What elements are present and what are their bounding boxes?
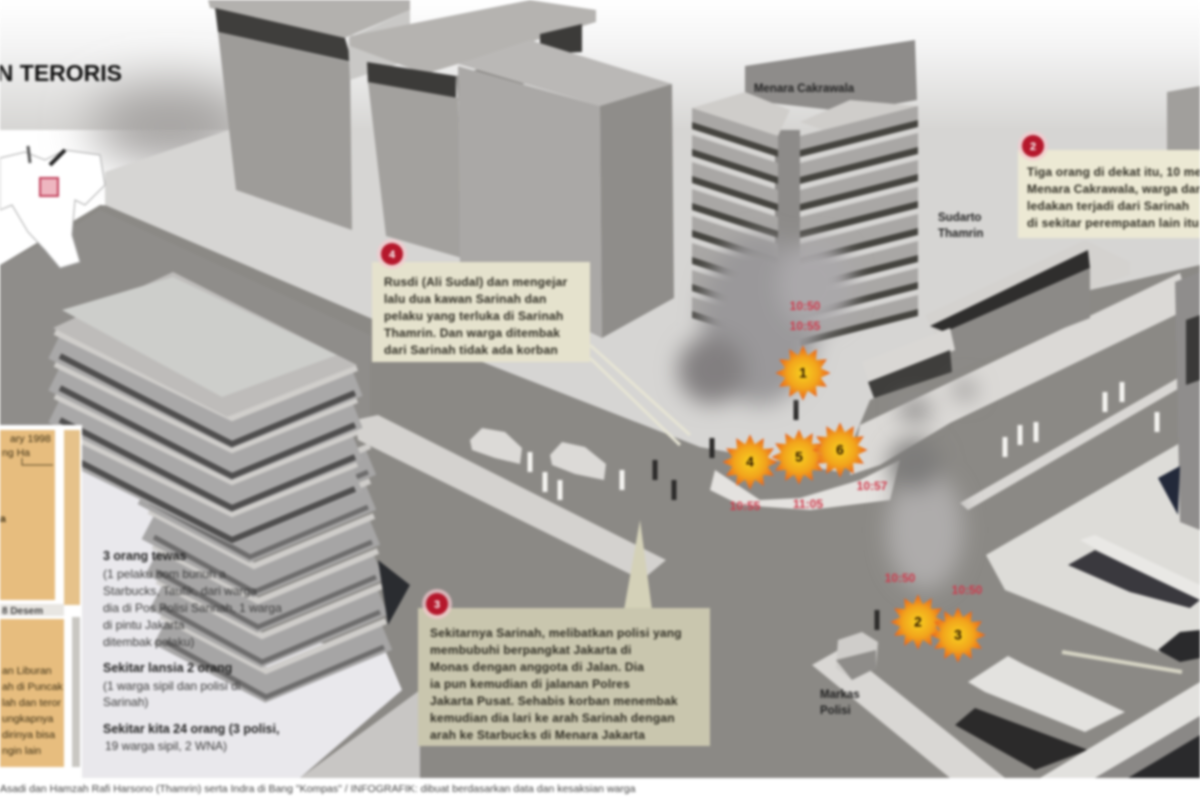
label: Sudarto Thamrin: Sudarto bbox=[938, 212, 981, 224]
callout: Rusdi: lalu dua kawan Sarinah dan bbox=[384, 292, 547, 306]
callout: Rusdi: Rusdi (Ali Sudal) dan mengejar bbox=[384, 275, 567, 289]
casualty list bbox=[103, 549, 282, 753]
label: post: Polisi bbox=[820, 705, 851, 717]
callout: Rusdi: pelaku yang terluka di Sarinah bbox=[384, 309, 563, 323]
building: middle block bbox=[350, 0, 596, 258]
tan panel lower: dirinya bisa bbox=[2, 729, 55, 741]
casualty list: Sarinah) bbox=[103, 695, 148, 709]
tan panel lower bbox=[0, 619, 64, 767]
building: right edge column bbox=[1175, 272, 1200, 530]
callout: Starbucks: Sekitarnya Sarinah, melibatkan polisi yang bbox=[430, 626, 682, 640]
label: post bbox=[820, 689, 860, 717]
callout: Starbucks: Monas dengan anggota di Jalan. Dia bbox=[430, 660, 644, 674]
title: N TERORIS bbox=[0, 60, 122, 86]
smoke plume upper bbox=[678, 235, 976, 422]
callout: top right: ledakan terjadi dari Sarinah bbox=[1027, 199, 1189, 213]
grey strip right bbox=[72, 617, 80, 767]
spike pointer above callout 2 bbox=[624, 520, 652, 610]
callout: Starbucks: membubuhi berpangkat Jakarta di bbox=[430, 643, 632, 657]
left grey haze bbox=[0, 210, 370, 425]
explosion 1: 1 bbox=[799, 366, 807, 381]
building: right edge top bbox=[1167, 86, 1200, 150]
explosion 2: 2 bbox=[914, 615, 922, 630]
pointer lines bbox=[590, 345, 690, 445]
lower left plaza shade bbox=[300, 690, 420, 778]
tan panel lower: ungkapnya bbox=[2, 713, 54, 725]
right road lane divider bbox=[960, 374, 1190, 510]
building: large left striped block bbox=[53, 272, 410, 697]
right sidewalk strip bbox=[850, 273, 1190, 475]
lower left plaza bbox=[80, 430, 402, 778]
building: front block bbox=[458, 40, 674, 338]
label: Sudarto Thamrin bbox=[938, 212, 983, 240]
building: sarinah wing bbox=[862, 240, 1130, 398]
label: post: Markas bbox=[820, 689, 860, 701]
footer credit: Asadi dan Hamzah Rafi Harsono (Thamrin) serta Indra di Bang "Kompas" / INFOGRAFIK: dibuat berdasarkan data dan kesaksian warga bbox=[0, 783, 636, 795]
upper plaza block bbox=[105, 128, 1200, 472]
grey date strip: 8 Desem bbox=[2, 606, 43, 617]
callout: Rusdi: Thamrin. Dan warga ditembak bbox=[384, 326, 560, 340]
red time labels: 10:55 bbox=[730, 499, 761, 513]
red time labels: 10:55 bbox=[790, 319, 821, 333]
casualty list: di pintu Jakarta bbox=[103, 618, 185, 632]
explosion 4 bbox=[722, 434, 778, 490]
casualty list: 19 warga sipil, 2 WNA) bbox=[105, 739, 227, 753]
ground road surface bbox=[0, 205, 1200, 780]
callout: Starbucks bbox=[418, 608, 710, 746]
callout: top right: Menara Cakrawala, warga dan bbox=[1027, 182, 1200, 196]
explosion 4: 4 bbox=[746, 455, 754, 470]
red time labels: 10:50 bbox=[790, 299, 821, 313]
casualty list: ditembak pelaku) bbox=[103, 635, 194, 649]
casualty list: 3 orang tewas bbox=[103, 549, 186, 563]
grey date strip bbox=[0, 604, 64, 617]
casualty list: Starbucks, Taufik, dari warga bbox=[103, 584, 257, 598]
badge 2: 2 bbox=[1030, 141, 1036, 153]
callout: Rusdi bbox=[372, 262, 590, 362]
smoke plume lower bbox=[887, 439, 963, 590]
badge 4 bbox=[377, 239, 407, 269]
explosion 6: 6 bbox=[836, 443, 844, 458]
badge 3 bbox=[422, 589, 452, 619]
callout: Starbucks: arah ke Starbucks di Menara Jakarta bbox=[430, 728, 645, 742]
red time labels: 10:50 bbox=[952, 583, 983, 597]
red time labels: 10:50 bbox=[885, 571, 916, 585]
casualty list: dia di Pos Polisi Sarinah, 1 warga bbox=[103, 601, 282, 615]
label: Sudarto Thamrin: Thamrin bbox=[938, 228, 983, 240]
red time labels: 11:05 bbox=[793, 497, 823, 511]
tan panel lower: ah di Puncak bbox=[2, 681, 63, 693]
casualty list: Sekitar lansia 2 orang bbox=[103, 661, 232, 675]
callout: top right: di sekitar perempatan lain itu bbox=[1027, 216, 1199, 230]
lower right block bbox=[986, 443, 1200, 652]
red time labels bbox=[730, 299, 983, 597]
corner pavement bbox=[710, 460, 900, 510]
background sky bbox=[0, 0, 1200, 130]
badge 4: 4 bbox=[389, 249, 396, 261]
building: lower right structures bbox=[955, 466, 1200, 778]
police post kiosk bbox=[836, 632, 878, 680]
building: left tall block bbox=[208, 0, 410, 230]
tan panel upper: ng Ha bbox=[2, 447, 30, 459]
tan strip right bbox=[64, 430, 80, 605]
badge 2 bbox=[1018, 131, 1048, 161]
badge 3: 3 bbox=[434, 599, 440, 611]
tan panel lower: ngin lain bbox=[2, 745, 41, 757]
explosion 3: 3 bbox=[954, 628, 962, 643]
explosion 6 bbox=[812, 422, 868, 478]
explosion 2 bbox=[890, 594, 946, 650]
cars on road bbox=[470, 428, 606, 480]
tan panel lower: an Liburan bbox=[2, 665, 52, 677]
callout: Starbucks: Jakarta Pusat. Sehabis korban menembak bbox=[430, 694, 678, 708]
locator map bbox=[0, 146, 105, 268]
callout: Starbucks: kemudian dia lari ke arah Sarinah dengan bbox=[430, 711, 675, 725]
explosion 5: 5 bbox=[795, 450, 803, 465]
red time labels: 10:57 bbox=[857, 479, 888, 493]
tan panel upper: a bbox=[0, 513, 6, 525]
casualty list: (1 pelaku bom bunuh a bbox=[103, 567, 226, 581]
casualty list: (1 warga sipil dan polisi di bbox=[103, 679, 240, 693]
explosion 1 bbox=[775, 345, 831, 401]
callout: Rusdi: dari Sarinah tidak ada korban bbox=[384, 343, 558, 357]
tan panel lower: lah dan teror bbox=[2, 697, 61, 709]
casualty list: Sekitar kita 24 orang (3 polisi, bbox=[103, 722, 279, 736]
footer strip bbox=[0, 778, 1200, 800]
sidewalk near post bbox=[812, 648, 1005, 778]
tan panel upper: ary 1998 bbox=[10, 433, 51, 445]
grey shade behind left plaza bbox=[90, 85, 250, 165]
left white background for panels bbox=[0, 425, 82, 778]
tower name label: Menara Cakrawala bbox=[754, 83, 855, 95]
explosion 5 bbox=[771, 429, 827, 485]
callout: Starbucks: ia pun kemudian di jalanan Polres bbox=[430, 677, 630, 691]
building: striped tower bbox=[692, 40, 918, 346]
callout: top right bbox=[1018, 150, 1200, 238]
pedestrians bbox=[528, 382, 1160, 630]
tan panel upper bbox=[0, 430, 55, 600]
explosion 3 bbox=[930, 607, 986, 663]
road median strip bbox=[355, 415, 666, 580]
